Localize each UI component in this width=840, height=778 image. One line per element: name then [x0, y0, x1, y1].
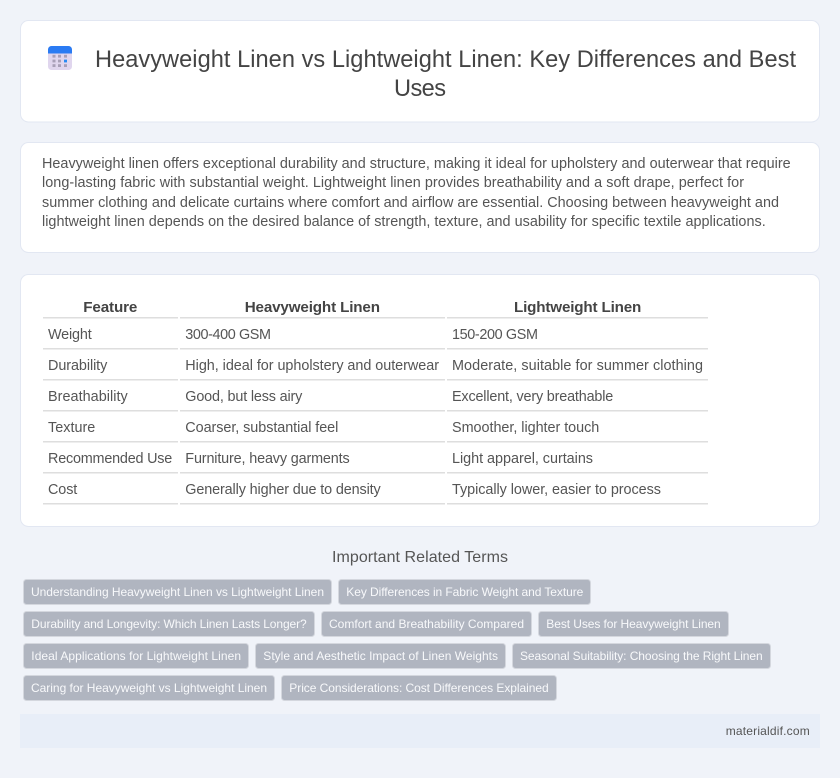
table row: recommended use — [43, 451, 708, 474]
table row: cost: Typically lower, easier to process — [452, 482, 661, 498]
panel: comparison table — [20, 274, 820, 526]
tags: related terms — [24, 580, 770, 700]
table row: durability — [43, 358, 708, 380]
table row: texture — [43, 420, 708, 442]
tag — [24, 644, 248, 668]
title: Heavyweight Linen vs Lightweight Linen: Key Differences and Best — [95, 47, 796, 73]
title — [95, 47, 796, 102]
table row: recommended use: Furniture, heavy garments — [185, 451, 350, 467]
tag: Comfort and Breathability Compared — [329, 617, 524, 631]
table row: recommended use: Recommended Use — [48, 451, 172, 467]
tag — [256, 644, 506, 668]
table row: recommended use: Light apparel, curtains — [452, 451, 593, 467]
table row: breathability: Breathability — [48, 389, 128, 405]
tag: Caring for Heavyweight vs Lightweight Linen — [31, 681, 267, 695]
table row: weight: 300-400 GSM — [185, 327, 271, 343]
table row: weight: Weight — [48, 327, 92, 343]
panel: title card — [20, 20, 820, 122]
heading: important related terms: Important Related Terms — [332, 549, 508, 566]
table header row: Feature — [83, 299, 137, 316]
table header row: Heavyweight Linen — [245, 299, 380, 316]
tag: Best Uses for Heavyweight Linen — [546, 617, 721, 631]
footer — [20, 714, 820, 748]
text block: summary paragraph: summer clothing and delicate curtains where comfort and airflow are essential. Choosing between heavyweight and — [42, 195, 779, 211]
panel: intro text — [20, 142, 820, 252]
tag — [24, 612, 314, 636]
tag — [282, 676, 556, 700]
text block: summary paragraph: long-lasting fabric with substantial weight. Lightweight linen provides breathability and a soft drape, perfect for — [42, 175, 744, 191]
table header row — [43, 299, 708, 318]
footer: materialdif.com — [726, 724, 810, 738]
table row: durability: Durability — [48, 358, 108, 374]
text block: summary paragraph — [42, 156, 791, 230]
tag — [322, 612, 532, 636]
title: Uses — [394, 76, 446, 102]
table row: breathability — [43, 389, 708, 412]
tag — [24, 676, 274, 700]
tag — [338, 580, 590, 604]
table row: texture: Smoother, lighter touch — [452, 420, 599, 436]
table row: durability: High, ideal for upholstery and outerwear — [185, 358, 439, 374]
tag: Style and Aesthetic Impact of Linen Weights — [263, 649, 498, 663]
table row: breathability: Excellent, very breathable — [452, 389, 613, 405]
table row: cost: Generally higher due to density — [185, 482, 381, 498]
table row: weight: 150-200 GSM — [452, 327, 538, 343]
tag — [24, 580, 332, 604]
table row: texture: Coarser, substantial feel — [185, 420, 338, 436]
table row: breathability: Good, but less airy — [185, 389, 303, 405]
table header row: Lightweight Linen — [514, 299, 641, 316]
text block: summary paragraph: lightweight linen depends on the desired balance of strength, texture, and usability for specific textile applications. — [42, 214, 766, 230]
tag — [512, 644, 770, 668]
tag: Understanding Heavyweight Linen vs Lightweight Linen — [31, 585, 324, 599]
table row: texture: Texture — [48, 420, 95, 436]
tag: Ideal Applications for Lightweight Linen — [31, 649, 241, 663]
table row: cost: Cost — [48, 482, 77, 498]
icon: calendar — [48, 46, 72, 70]
tag: Seasonal Suitability: Choosing the Right Linen — [520, 649, 763, 663]
table row: cost — [43, 482, 708, 504]
text block: summary paragraph: Heavyweight linen offers exceptional durability and structure, making it ideal for upholstery and outerwear that require — [42, 156, 791, 172]
table row: weight — [43, 327, 708, 350]
table row: durability: Moderate, suitable for summer clothing — [452, 358, 703, 374]
tag: Key Differences in Fabric Weight and Texture — [346, 585, 584, 599]
tag — [538, 612, 728, 636]
tag: Durability and Longevity: Which Linen Lasts Longer? — [31, 617, 307, 631]
tag: Price Considerations: Cost Differences Explained — [289, 681, 549, 695]
